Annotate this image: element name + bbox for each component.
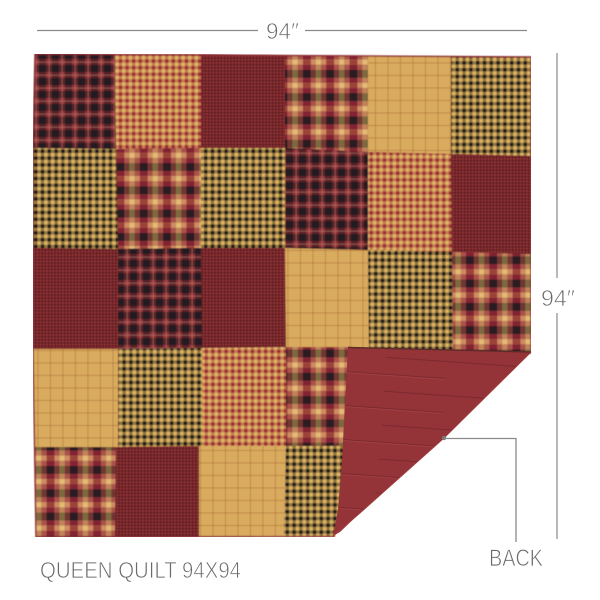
caption: QUEEN QUILT 94X94 — [40, 557, 241, 583]
patch row 2 — [33, 148, 531, 255]
quilt — [33, 54, 531, 537]
patch row 5 — [35, 446, 346, 537]
patch row 3 — [33, 248, 531, 354]
label: top 94 inches: 94″ — [266, 18, 299, 44]
patch row 1 — [33, 54, 531, 156]
label: right 94 inches: 94″ — [541, 285, 575, 311]
label: back: BACK — [489, 545, 543, 572]
patch row 4 — [33, 347, 350, 447]
quilt binding edge — [33, 54, 531, 537]
quilt base — [33, 54, 531, 537]
folded quilt back — [333, 347, 531, 536]
back callout leader — [442, 436, 543, 572]
